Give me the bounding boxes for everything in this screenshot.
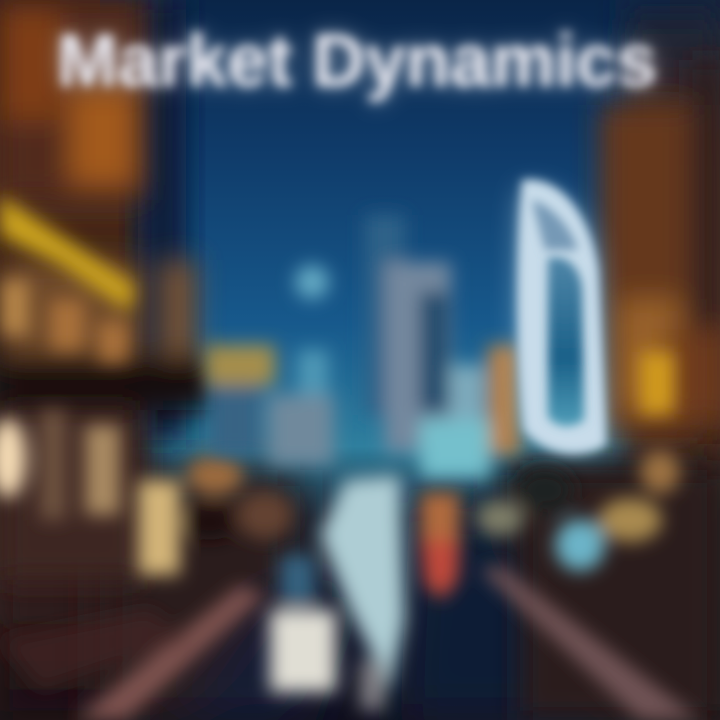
right lit windows and shop lights — [476, 352, 680, 571]
right side base — [670, 0, 720, 720]
road reflections — [270, 475, 700, 720]
tower body — [518, 180, 606, 453]
left dark tower — [138, 0, 186, 440]
tower opening — [548, 257, 584, 426]
central skyscrapers — [205, 215, 520, 478]
tower glow — [519, 190, 604, 449]
left yellow sign band — [0, 195, 135, 362]
left sidewalk light streak — [0, 585, 265, 720]
left side soft base — [0, 0, 150, 720]
left buildings — [0, 0, 215, 580]
title: Market Dynamics: Market Dynamics — [57, 19, 657, 102]
street ground — [100, 460, 720, 720]
left side base — [0, 0, 100, 720]
title glow: Market Dynamics — [57, 19, 657, 102]
tower top panel — [532, 200, 578, 250]
white curved tower — [518, 180, 606, 453]
right side soft base — [625, 0, 720, 720]
left lit windows — [0, 410, 293, 575]
right buildings — [520, 60, 720, 720]
